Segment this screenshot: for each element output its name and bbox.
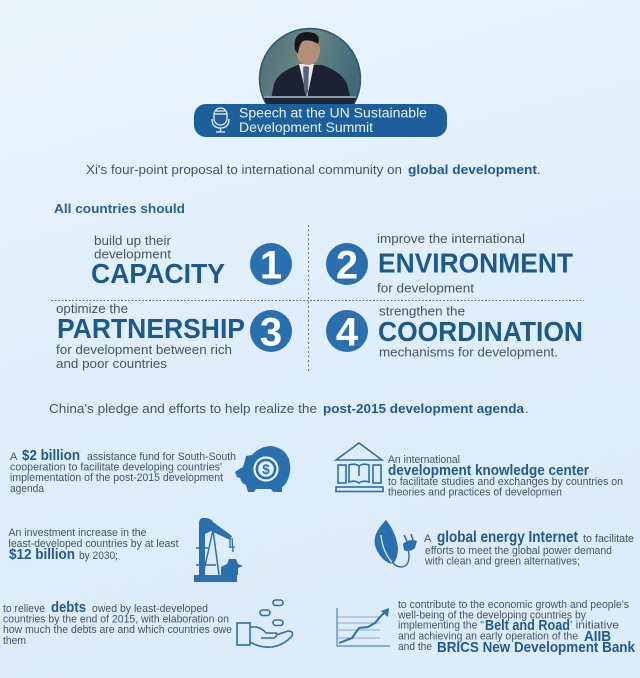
intro sentence: global development (408, 162, 538, 177)
icon: piggy bank with dollar (235, 446, 290, 492)
pledge: $2 billion fund: agenda (10, 483, 45, 495)
icon: leaf with plug (375, 520, 417, 567)
pledge: relieve debts: them (3, 635, 26, 647)
section heading: China's pledge: . (525, 401, 529, 416)
icon: oil pump (194, 518, 243, 582)
intro sentence (86, 162, 541, 177)
icon: number 1 (250, 243, 292, 288)
pledge: $2 billion fund: $2 billion (22, 447, 80, 464)
point 4: coordination: mechanisms for development. (379, 344, 558, 360)
pledge: knowledge center: An international (388, 454, 460, 466)
pledge: Belt and Road, AIIB, BRICS bank: implementing the " (398, 620, 484, 632)
point 4: coordination: strengthen the (379, 304, 465, 318)
pledge: $12 billion investment: An investment increase in the (8, 527, 146, 539)
quadrant dividers (51, 225, 584, 373)
pledge: relieve debts: owed by least-developed (92, 603, 208, 615)
pledge: Belt and Road, AIIB, BRICS bank: and achieving an early operation of the (398, 630, 578, 642)
portrait photo of speaker (257, 26, 363, 104)
section heading: China's pledge: post-2015 development agenda (323, 401, 525, 416)
icon: number 4: 4 (336, 310, 359, 354)
pledge: Belt and Road, AIIB, BRICS bank (397, 599, 636, 656)
pledge: Belt and Road, AIIB, BRICS bank: and the (398, 641, 432, 653)
pledge: $2 billion fund: assistance fund for South-South (87, 451, 236, 463)
pledge: $2 billion fund: cooperation to facilitate developing countries' (10, 462, 222, 474)
pledge: Belt and Road, AIIB, BRICS bank: AIIB (584, 629, 611, 645)
pledge: $2 billion fund: A (10, 451, 18, 463)
icon: number 3 (250, 310, 292, 354)
subheading: all countries should: All countries should (54, 201, 185, 216)
pledge: global energy Internet: with clean and green alternatives; (424, 556, 580, 568)
icon: hand with coins (237, 600, 292, 647)
section heading: China's pledge: China's pledge and efforts to help realize the (49, 401, 317, 416)
point 1: capacity: build up their (94, 233, 172, 248)
pledge: Belt and Road, AIIB, BRICS bank: ' initiative (570, 620, 619, 632)
pledge: global energy Internet (424, 529, 634, 568)
pledge: Belt and Road, AIIB, BRICS bank: well-being of the developing countries by (397, 610, 586, 622)
point 3: partnership: optimize the (56, 301, 128, 316)
point 2: environment: for development (377, 280, 474, 296)
pledge: Belt and Road, AIIB, BRICS bank: Belt and Road (485, 618, 570, 634)
icon: piggy bank with dollar: $ (262, 462, 270, 477)
pledge: global energy Internet: to facilitate (583, 533, 634, 545)
section heading: China's pledge (49, 401, 529, 416)
point 2: environment: ENVIRONMENT (378, 248, 573, 278)
icon: number 3: 3 (260, 310, 282, 354)
pledge: Belt and Road, AIIB, BRICS bank: to contribute to the economic growth and people's (398, 599, 629, 611)
point 1: capacity: development (94, 246, 171, 262)
pledge: global energy Internet: global energy Internet (437, 529, 578, 546)
pledge: relieve debts: countries by the end of 2015, with elaboration on (3, 614, 229, 626)
point 3: partnership: and poor countries (56, 356, 168, 371)
point 4: coordination: COORDINATION (378, 316, 583, 347)
icon: rising line chart (337, 608, 390, 646)
pledge: knowledge center: development knowledge center (388, 462, 589, 479)
icon: number 4 (326, 310, 368, 354)
pledge: relieve debts: how much the debts are and which countries owe (3, 624, 232, 636)
pledge: $12 billion investment: by 2030; (79, 550, 118, 562)
point 4: coordination (326, 304, 583, 360)
pledge: global energy Internet: efforts to meet the global power demand (425, 545, 612, 557)
pledge: global energy Internet: A (424, 533, 432, 545)
speech title banner (194, 104, 447, 137)
point 2: environment: improve the international (377, 231, 525, 246)
pledge: knowledge center: theories and practices of developmen (388, 486, 562, 498)
speech title banner: Speech at the UN Sustainable (239, 106, 427, 120)
point 2: environment (326, 231, 573, 296)
point 3: partnership (56, 301, 292, 371)
icon: number 2: 2 (336, 244, 358, 288)
point 1: capacity: CAPACITY (91, 258, 225, 289)
pledge: knowledge center (388, 454, 623, 498)
pledge: $2 billion fund (10, 447, 236, 495)
pledge: relieve debts: debts (51, 599, 86, 616)
pledge: $2 billion fund: implementation of the post-2015 development (10, 472, 223, 484)
pledge: $12 billion investment: least-developed countries by at least (8, 538, 178, 550)
icon: library with book (336, 443, 383, 492)
pledge: $12 billion investment: $12 billion (9, 546, 75, 563)
icon: microphone (212, 108, 229, 132)
point 3: partnership: for development between rich (56, 342, 232, 357)
intro sentence: Xi's four-point proposal to international community on (86, 162, 402, 177)
intro sentence: . (537, 162, 541, 177)
speech title banner: Development Summit (239, 120, 373, 135)
icon: number 1: 1 (260, 244, 282, 288)
pledge: relieve debts (3, 599, 232, 647)
pledge: $12 billion investment (8, 527, 178, 563)
icon: number 2 (326, 243, 368, 288)
pledge: knowledge center: to facilitate studies and exchanges by countries on (388, 476, 623, 488)
point 3: partnership: PARTNERSHIP (57, 313, 245, 344)
pledge: relieve debts: to relieve (3, 603, 45, 615)
point 1: capacity (91, 233, 292, 289)
